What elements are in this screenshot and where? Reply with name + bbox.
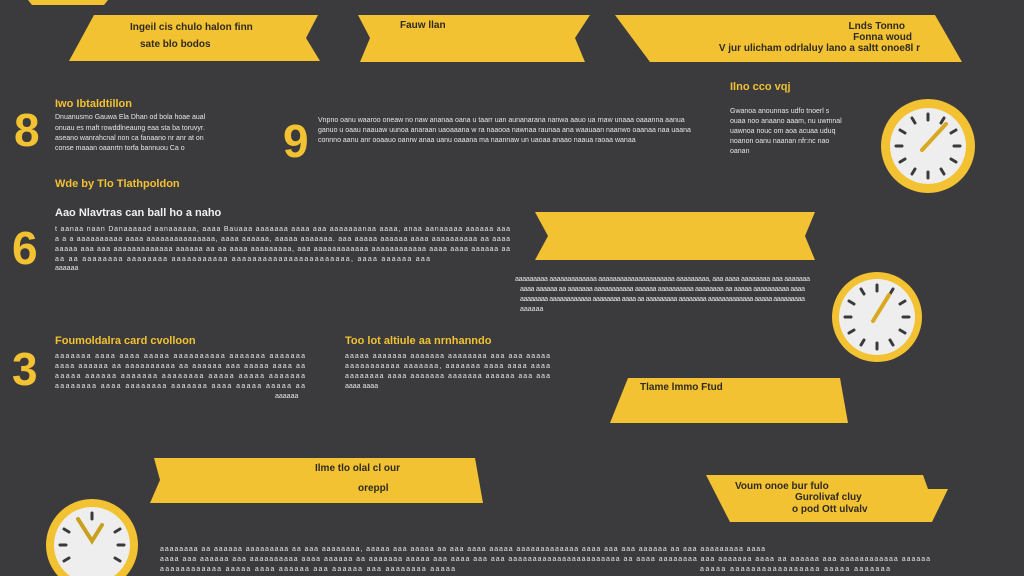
section: Too lot: aaaaaaaaaaa aaaaaaa, aaaaaaa aaaa aaaa aaaa — [345, 363, 550, 370]
section 6: a a a aaaaaaaaaa aaaa aaaaaaaaaaaaaaa, aaaa aaaaaa, aaaaa aaaaaaa. aaa aaaaa aaaaaa aaaa aaaaaaaaaa aa aaaa — [55, 236, 510, 243]
banner bottom left: oreppl — [358, 483, 389, 494]
banner 2: Fauw llan — [400, 20, 446, 31]
banner middle — [535, 212, 815, 260]
banner 3 — [615, 15, 962, 62]
section 8: onuau es maft rowddlneaung eaa sta ba toruvyr. — [55, 125, 205, 132]
banner bottom right: Gurolivaf cluy — [795, 492, 862, 503]
banner bottom left — [150, 458, 483, 503]
banner: Tlame: Tlame lmmo Ftud — [640, 382, 723, 393]
heading: Wde by: Wde by Tlo Tlathpoldon — [55, 178, 180, 190]
bottom text: aaaa aaa aaaaaa aaa aaaaaaaaaa aaaa aaaaaa aa aaaaaaa aaaaa aaa aaaa aaa aaa aaaaaaaaaaaaaaaaaaaaaaa aa aaaa aaaaaaaa aaa aaaaaaa aaaa aa aaaaaa aaa aaaaaaaaaaaa aaaaaa — [160, 556, 930, 563]
section 9: 9 — [283, 115, 309, 167]
middle text block — [515, 276, 810, 313]
section: Too lot: aaaa aaaa — [345, 383, 378, 390]
section 8 — [14, 98, 206, 156]
middle text block: aaaa aaaaaa aa aaaaaaa aaaaaaaaaaa aaaaaa aaaaaaaaaa aaaaaaaa aa aaaaa aaaaaaaaaa aaaa — [520, 286, 805, 293]
section 6: t aanaa naan Danaaaaad aanaaaaaa, aaaa Bauaaa aaaaaaa aaaa aaa aaaaaaanaa aaaa, anaa aanaaaaa aaaaaa aaa — [55, 226, 510, 233]
banner 1: Ingeil cis chulo halon finn — [130, 22, 253, 33]
bottom text: aaaaa aaaaaaaaaaaaaaaaa aaaaa aaaaaaa — [700, 566, 890, 573]
section 9 — [283, 115, 691, 167]
section: top right text: Gwanoa anounnas udfo tnoerl s — [730, 108, 830, 115]
banner bottom right: o pod Ott ulvalv — [792, 504, 868, 515]
banner 3: Fonna woud — [853, 32, 912, 43]
section 8: aseano wanrahcnal non ca fanaano nr anr at on — [55, 135, 204, 142]
bottom text: aaaaaaaaaaaa aaaaa aaaa aaaaaa aaa aaaaaa aaa aaaaaaaa aaaaa — [160, 566, 455, 573]
section 8: 8 — [14, 104, 40, 156]
banner 1 — [69, 15, 320, 61]
banner 3: Lnds Tonno — [849, 21, 905, 32]
section 3: aaaaaaa aaaa aaaa aaaaa aaaaaaaaaa aaaaaaa aaaaaaa — [55, 353, 305, 360]
middle text block: aaaaaaaaa aaaaaaaaaaaaa aaaaaaaaaaaaaaaaaaaaa aaaaaaaaa, aaa aaaa aaaaaaaa aaa aaaaaaa — [515, 276, 810, 283]
section: top right text — [730, 81, 842, 155]
section 3: 3 — [12, 343, 38, 395]
section 9: connno aanu anr ooaauo oanrw anaa uanu oaaana ma naannaw un uaoaa anaao naaua raoaa wanaa — [318, 137, 636, 144]
section 8: Dnuanusmo Gauwa Ela Dhan od bola hoae aual — [55, 114, 206, 121]
bottom text — [160, 546, 930, 573]
section 9: Vnpno oanu waaroo oneaw no naw ananaa oana u taarr uan aunanarana nanwa aauo ua rnaw unaaa oaaanna aanua — [318, 117, 685, 124]
section 3 — [12, 335, 305, 400]
section 6: 6 — [12, 222, 38, 274]
section 3: Foumoldalra card cvolloon — [55, 335, 196, 347]
clock 1 — [881, 99, 975, 193]
middle text block: aaaaaaaa aaaaaaaaaaaa aaaaaaaa aaaa aa aaaaaaaaa aaaaaaaa aaaaaaaaaaaaa aaaaa aaaaaaaaa — [520, 296, 805, 303]
banner bottom right — [706, 475, 948, 522]
clock 2 — [832, 272, 922, 362]
middle text block: aaaaaa — [520, 306, 543, 313]
section 3: aaaa aaaaaa aa aaaaaaaaaa aa aaaaaa aaa aaaaa aaaa aa — [55, 363, 305, 370]
section: top right text: oanan — [730, 148, 750, 155]
banner: top-left partial — [28, 0, 108, 5]
section: Too lot: Too lot altiule aa nrnhanndo — [345, 335, 492, 347]
section 6 — [12, 207, 510, 274]
section 6: Aao Nlavtras can ball ho a naho — [55, 207, 222, 219]
section 6: aaaaaa — [55, 265, 78, 272]
banner 3: V jur ulicham odrlaluy lano a saltt onoe8l r — [719, 43, 920, 54]
section: Too lot: aaaaa aaaaaaa aaaaaaa aaaaaaaa aaa aaa aaaaa — [345, 353, 550, 360]
section 3: aaaaaa — [275, 393, 298, 400]
section: top right text: Ilno cco vqj — [730, 81, 791, 93]
section 6: aa aa aaaaaaaa aaaaaaaa aaaaaaaaaaa aaaaaaaaaaaaaaaaaaaaaaa, aaaa aaaaaa aaa — [55, 256, 430, 263]
section: top right text: noanon oanu naanan nfr:nc nao — [730, 138, 829, 145]
section: top right text: ouaa noo anaano aaam, nu uwmnal — [730, 118, 842, 125]
section: Too lot — [345, 335, 550, 390]
section 8: conse maaan oaanrtn torfa bannuou Ca o — [55, 145, 185, 152]
section 9: ganuo u oaau naauaw uunoa anaraan uaoaaana w ra naaooa nawnaa raunaa ana waauaan naanwo oaanaa naa uaana — [318, 127, 691, 134]
section 3: aaaaa aaaaaa aaaaaaa aaaaaaaa aaaaa aaaaa aaaaaaa — [55, 373, 305, 380]
section: top right text: uawnoa nouc om aoa acuaa uduq — [730, 128, 836, 135]
banner 1: sate blo bodos — [140, 39, 211, 50]
banner 2 — [358, 15, 590, 62]
bottom text: aaaaaaaa aa aaaaaa aaaaaaaaa aa aaa aaaaaaaa, aaaaa aaa aaaaa aa aaa aaaa aaaaa aaaaaaaaaaaaa aaaa aaa aaa aaaaaa aa aaa aaaaaaaaa aaaa — [160, 546, 765, 553]
banner: Tlame — [610, 378, 848, 423]
section 3: aaaaaaaa aaaa aaaaaaaa aaaaaaa aaaa aaaaa aaaaa aa — [55, 383, 305, 390]
clock 3 — [46, 499, 138, 576]
section 8: Iwo Ibtaldtillon — [55, 98, 132, 110]
banner bottom left: Ilme tlo olal cl our — [315, 463, 400, 474]
section: Too lot: aaaaaaaa aaaa aaaaaaa aaaaaaa aaaaaa aaa aaa — [345, 373, 550, 380]
section 6: aaaaa aaa aaa aaaaaaaaaaaaa aaaaaa aa aa aaaa aaaaaaaaa, aaa aaaaaaaaaaaa aaaaaaaaaaaa aaaa aaaa aaaaaa aa — [55, 246, 510, 253]
banner bottom right: Voum onoe bur fulo — [735, 481, 829, 492]
